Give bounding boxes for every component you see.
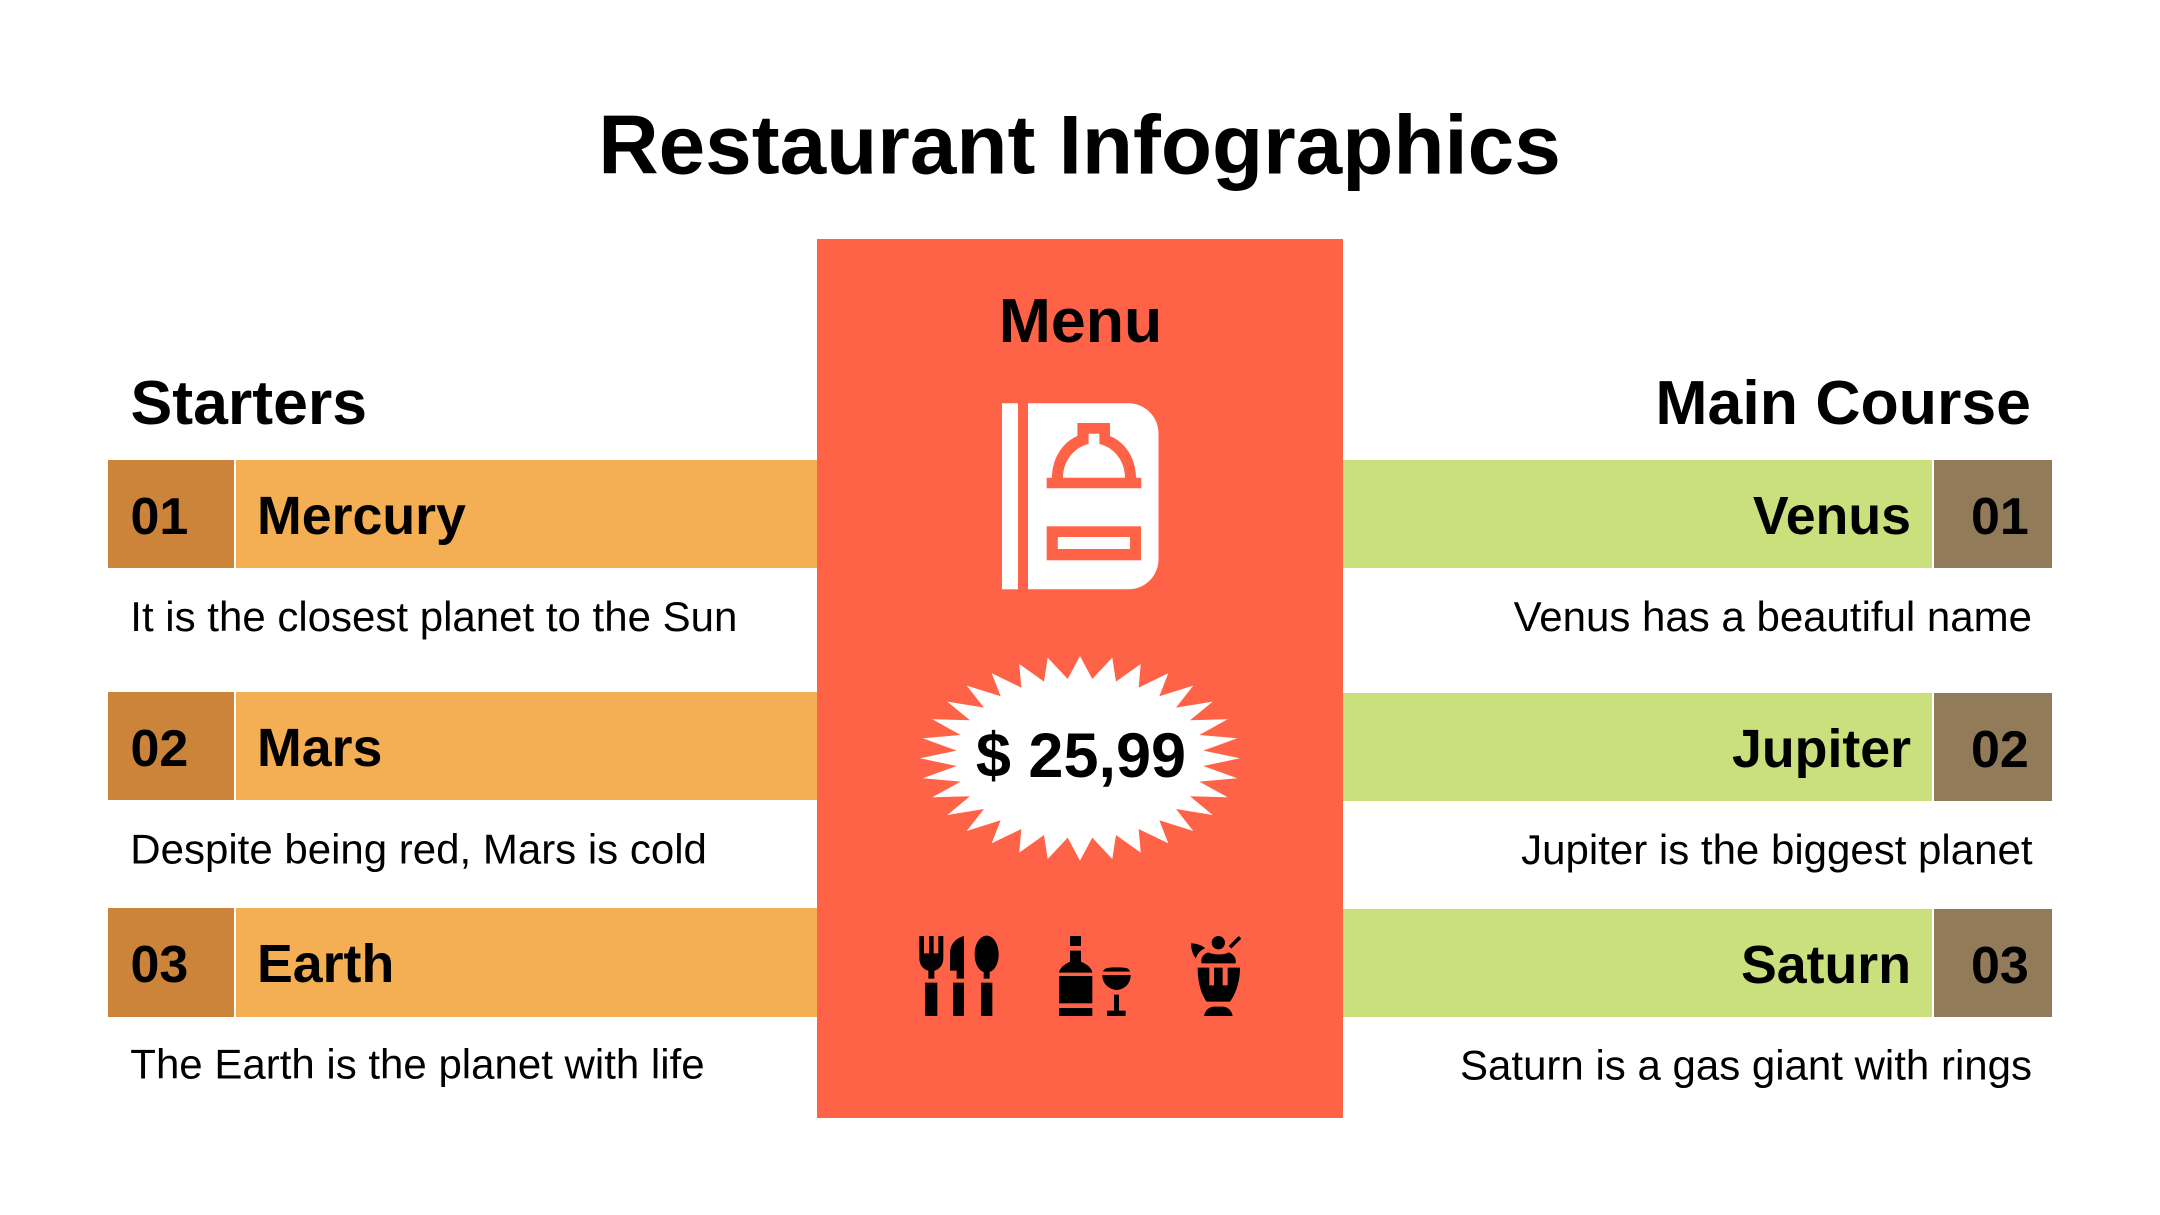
- row: jupiter: [1343, 693, 2052, 873]
- price badge: $ 25,99: [976, 721, 1186, 791]
- icon: menu book: [1002, 403, 1158, 589]
- row: mars: Despite being red, Mars is cold: [130, 826, 707, 872]
- row: earth: Earth: [257, 934, 394, 994]
- icon: sundae: [1191, 936, 1240, 1016]
- row: saturn: Saturn is a gas giant with rings: [1460, 1042, 2032, 1088]
- row: mercury: [108, 460, 817, 640]
- row: jupiter: 02: [1971, 721, 2029, 779]
- heading: starters: Starters: [130, 368, 367, 438]
- icon: cutlery: [919, 936, 999, 1016]
- row: earth: The Earth is the planet with life: [130, 1040, 705, 1088]
- menu heading: Menu: [999, 286, 1162, 356]
- row: jupiter: Jupiter: [1732, 719, 1911, 779]
- heading: main course: Main Course: [1655, 368, 2031, 438]
- row: mars: [108, 692, 817, 872]
- panel: menu: [817, 239, 1343, 1118]
- row: venus: [1343, 460, 2052, 640]
- panel: starters: [108, 368, 817, 1088]
- row: saturn: 03: [1971, 937, 2029, 995]
- row: saturn: Saturn: [1741, 935, 1911, 995]
- row: venus: 01: [1971, 488, 2029, 546]
- row: saturn: [1343, 909, 2052, 1088]
- row: mercury: 01: [130, 488, 188, 546]
- row: mars: 02: [130, 720, 188, 778]
- row: earth: 03: [130, 936, 188, 994]
- row: jupiter: Jupiter is the biggest planet: [1521, 826, 2033, 873]
- title: Restaurant Infographics: [598, 98, 1561, 192]
- row: earth: [108, 908, 817, 1088]
- row: mars: Mars: [257, 718, 382, 778]
- row: mercury: Mercury: [257, 486, 466, 546]
- panel: main course: [1343, 368, 2052, 1088]
- row: mercury: It is the closest planet to the Sun: [130, 593, 737, 640]
- icon: bottle and glass: [1059, 936, 1131, 1016]
- row: venus: Venus: [1753, 486, 1911, 546]
- price badge: [920, 656, 1240, 861]
- row: venus: Venus has a beautiful name: [1514, 593, 2032, 640]
